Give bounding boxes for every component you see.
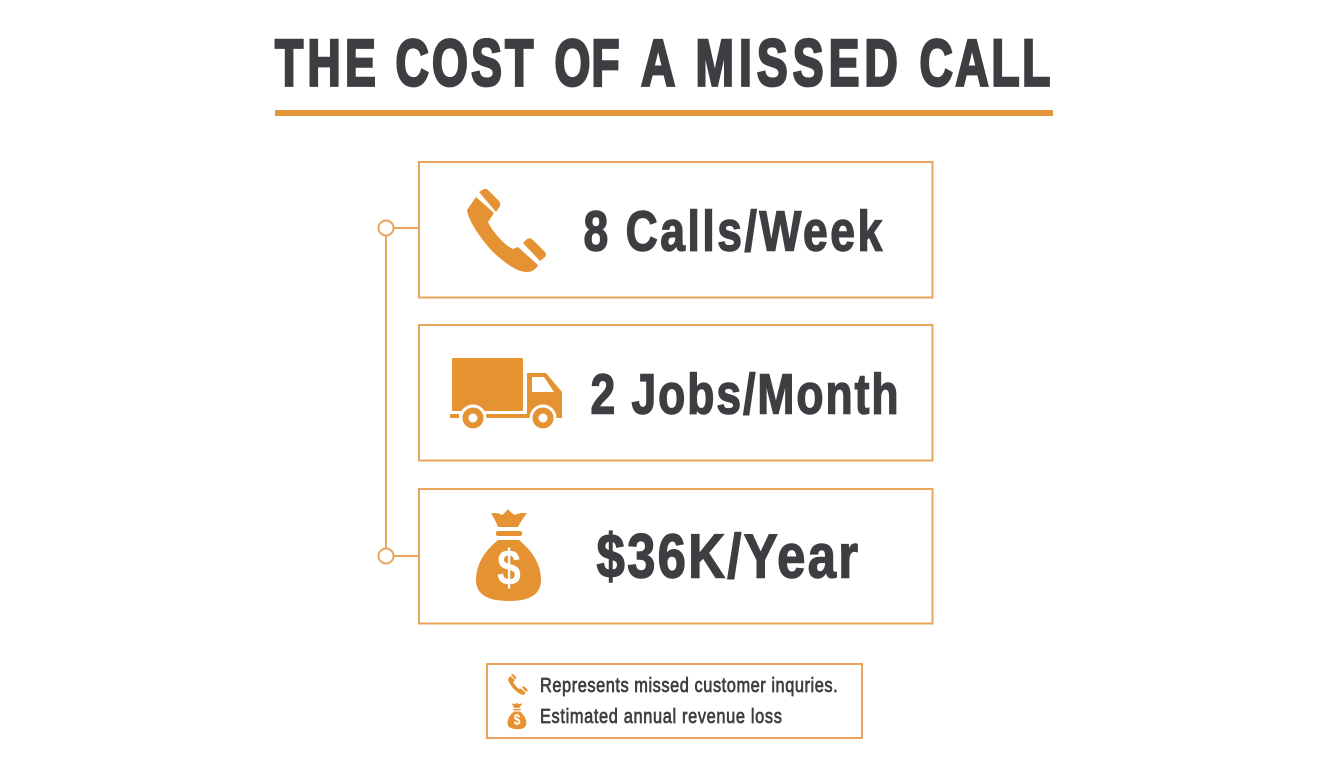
icon: legend money bag — [508, 702, 526, 729]
panel: dollars per year — [419, 489, 932, 624]
legend — [487, 664, 862, 738]
icon: legend money bag: $ — [514, 712, 521, 728]
stat: $36K/Year: $36K/Year — [596, 523, 858, 592]
legend text: calls: Represents missed customer inquries. — [540, 673, 838, 696]
title: COST — [396, 26, 534, 101]
panel: jobs per month — [419, 325, 932, 460]
connector: bracket linking the first and last panels — [378, 220, 418, 564]
icon: money bag — [476, 509, 541, 601]
stat: 2 Jobs/Month: 2 Jobs/Month — [590, 362, 899, 426]
title: MISSED — [696, 26, 898, 101]
icon: phone — [467, 189, 546, 272]
icon: truck — [450, 358, 562, 432]
icon: money bag: $ — [497, 540, 521, 596]
icon: legend phone — [508, 674, 528, 695]
title: A — [641, 27, 675, 100]
stat: 8 Calls/Week: 8 Calls/Week — [584, 199, 883, 263]
panel: calls per week — [419, 162, 932, 298]
legend text: revenue: Estimated annual revenue loss — [540, 704, 782, 727]
title: OF — [554, 26, 620, 101]
title: CALL — [920, 26, 1050, 101]
title: THE — [275, 26, 376, 101]
title — [275, 26, 1053, 116]
